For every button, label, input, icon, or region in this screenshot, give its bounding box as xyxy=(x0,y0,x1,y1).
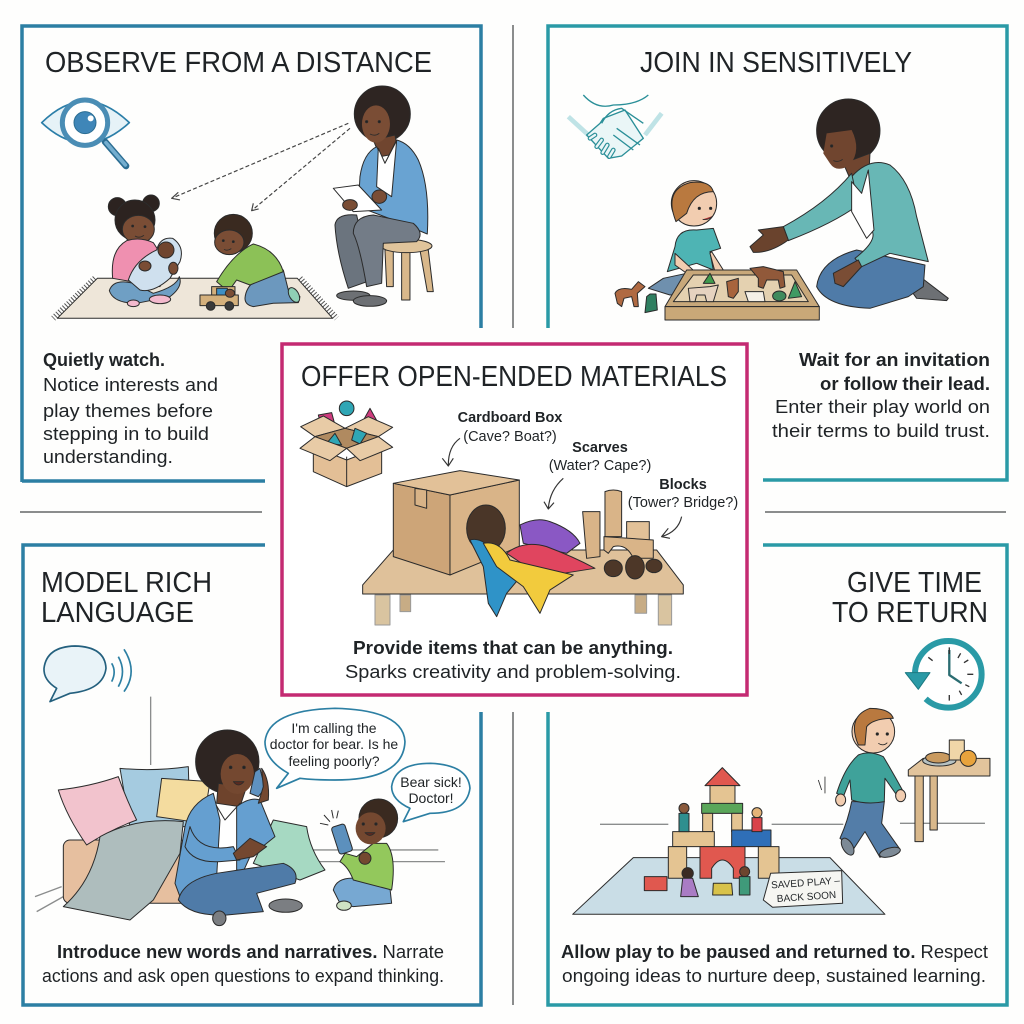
labels: material ideas: (Tower? Bridge?) xyxy=(628,495,738,511)
panel: join in sensitively xyxy=(548,26,1007,480)
text: provide items xyxy=(345,638,681,682)
labels: material ideas: Cardboard Box xyxy=(458,410,562,426)
text: bubble speech xyxy=(270,720,462,806)
text: provide items: Sparks creativity and problem-solving. xyxy=(345,662,681,682)
text: quietly watch: play themes before xyxy=(43,401,213,421)
toddler with toy phone xyxy=(320,799,398,910)
text: bubble speech: I'm calling the xyxy=(291,720,377,736)
table with snacks xyxy=(908,740,990,842)
illustration: saved block play and child walking xyxy=(573,641,990,914)
text: allow play to be paused: Allow play to be paused and returned to. Respect xyxy=(561,942,988,962)
text: wait for an invitation xyxy=(772,350,990,441)
text: wait for an invitation: or follow their lead. xyxy=(820,374,990,394)
text: bubble speech: Bear sick! xyxy=(400,774,462,790)
labels: material ideas: Blocks xyxy=(659,477,707,493)
cardboard box xyxy=(393,471,519,575)
boy with sand tray animals xyxy=(615,181,819,320)
heading: model rich language xyxy=(41,567,212,629)
text: allow play to be paused: ongoing ideas to nurture deep, sustained learning. xyxy=(562,966,986,986)
block castle xyxy=(644,768,779,897)
block figures xyxy=(644,803,762,897)
blue mat xyxy=(573,858,885,914)
panel: observe from a distance xyxy=(22,26,481,482)
text: sign: SAVED PLAY – xyxy=(771,876,841,891)
text: sign: BACK SOON xyxy=(776,890,837,905)
text: wait for an invitation: Enter their play world on xyxy=(775,397,990,417)
teacher on phone xyxy=(175,730,302,926)
icon: speech bubble with sound waves xyxy=(44,646,131,702)
text: introduce new words: actions and ask open questions to expand thinking. xyxy=(42,966,444,986)
girl with baby doll xyxy=(108,195,181,307)
text: quietly watch: stepping in to build xyxy=(43,424,209,444)
scarves xyxy=(470,520,595,617)
labels: material ideas: (Cave? Boat?) xyxy=(463,429,557,445)
boy with toy truck xyxy=(200,214,302,310)
icon: eye and magnifier xyxy=(42,100,129,166)
text: quietly watch: understanding. xyxy=(43,447,173,467)
illustration: teacher and toddler on phones xyxy=(35,646,470,926)
text: allow play to be paused xyxy=(561,942,988,986)
icon: open box with shapes xyxy=(300,401,393,487)
speech bubble: teacher xyxy=(265,708,405,788)
heading: offer open-ended materials: OFFER OPEN-ENDED MATERIALS xyxy=(301,361,727,393)
text: sign xyxy=(771,876,842,905)
text: provide items: Provide items that can be anything. xyxy=(353,638,673,658)
text: introduce new words xyxy=(42,942,444,986)
text: quietly watch: Notice interests and xyxy=(43,375,218,395)
heading: model rich language: MODEL RICH xyxy=(41,567,212,599)
heading: give time to return: TO RETURN xyxy=(832,597,988,629)
heading: observe from a distance: OBSERVE FROM A DISTANCE xyxy=(45,47,432,79)
panel: give time to return xyxy=(548,545,1007,1005)
text: wait for an invitation: their terms to build trust. xyxy=(772,421,990,441)
heading: give time to return: GIVE TIME xyxy=(847,567,982,599)
heading: give time to return xyxy=(832,567,988,629)
sofa with pillows and throw xyxy=(58,767,325,920)
labels: material ideas: (Water? Cape?) xyxy=(549,458,651,474)
blocks and pinecones xyxy=(583,490,662,579)
text: wait for an invitation: Wait for an invitation xyxy=(799,350,990,370)
heading: model rich language: LANGUAGE xyxy=(41,597,194,629)
child walking xyxy=(818,708,906,859)
teacher kneeling xyxy=(750,99,948,308)
label arrows xyxy=(442,438,682,538)
rug xyxy=(53,278,337,318)
sign: saved play xyxy=(763,871,843,907)
illustration: teacher joins child xyxy=(568,95,948,320)
arrows: lines of sight xyxy=(172,123,350,211)
toy animals xyxy=(615,267,802,313)
text: quietly watch: Quietly watch. xyxy=(43,350,165,370)
text: introduce new words: Introduce new words and narratives. Narrate xyxy=(57,942,444,962)
labels: material ideas xyxy=(458,410,738,511)
icon: clock with return arrow xyxy=(905,641,982,708)
text: bubble speech: Doctor! xyxy=(408,790,454,806)
text: quietly watch xyxy=(43,350,218,467)
text: bubble speech: doctor for bear. Is he xyxy=(270,736,398,752)
teacher on stool with notepad xyxy=(333,86,433,306)
panel: model rich language xyxy=(23,545,481,1005)
text: bubble speech: feeling poorly? xyxy=(288,753,380,769)
speech bubble: toddler xyxy=(392,763,470,822)
icon: handshake xyxy=(568,95,662,158)
illustration: materials on table xyxy=(300,401,683,625)
table xyxy=(363,550,683,625)
panel: offer open-ended materials xyxy=(282,344,747,695)
heading: join in sensitively: JOIN IN SENSITIVELY xyxy=(640,47,912,79)
illustration: observer and children xyxy=(42,86,433,318)
labels: material ideas: Scarves xyxy=(572,440,628,456)
